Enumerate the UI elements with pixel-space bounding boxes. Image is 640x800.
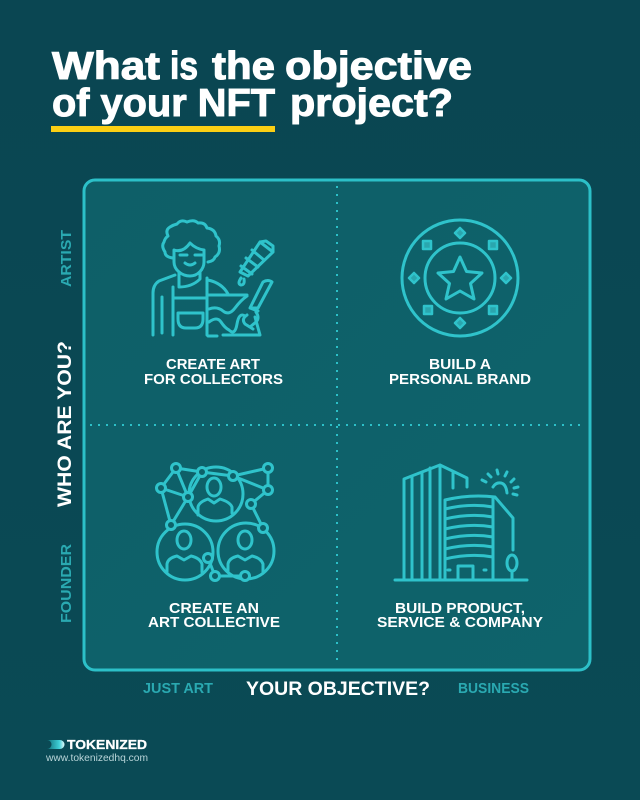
y axis label: artist: ARTIST	[58, 230, 75, 287]
label: build a personal brand	[389, 356, 531, 388]
y axis title: who are you?: WHO ARE YOU?	[55, 341, 76, 507]
icon: art collective network	[156, 464, 274, 580]
website url: www.tokenizedhq.com	[45, 753, 148, 764]
title	[52, 45, 472, 125]
title: of your NFT	[52, 82, 275, 125]
x axis label: just art: JUST ART	[143, 680, 213, 697]
label: create art for collectors: FOR COLLECTORS	[144, 371, 283, 388]
title: project?	[290, 82, 453, 125]
label: build product, service & company: SERVICE & COMPANY	[377, 614, 543, 631]
logo: tokenized: TOKENIZED	[67, 737, 147, 752]
y axis label: founder: FOUNDER	[58, 544, 75, 623]
label: create an art collective: CREATE AN	[169, 600, 259, 617]
panel: quadrant matrix	[84, 180, 590, 670]
x axis title: your objective?: YOUR OBJECTIVE?	[246, 679, 430, 700]
label: create art for collectors	[144, 356, 283, 388]
title: What	[52, 45, 160, 88]
label: create art for collectors: CREATE ART	[166, 356, 260, 373]
title: objective	[285, 45, 472, 88]
title: is	[170, 45, 198, 88]
label: build a personal brand: BUILD A	[429, 356, 491, 373]
icon: personal brand medal	[402, 220, 518, 336]
title: the	[212, 45, 275, 88]
label: build a personal brand: PERSONAL BRAND	[389, 371, 531, 388]
icon: building	[395, 465, 527, 580]
label: build product, service & company: BUILD PRODUCT,	[395, 600, 525, 617]
label: create an art collective	[148, 600, 280, 631]
icon: artist with brush	[153, 221, 273, 336]
x axis label: business: BUSINESS	[458, 680, 529, 697]
title underline	[51, 126, 275, 132]
label: create an art collective: ART COLLECTIVE	[148, 614, 280, 631]
label: build product, service & company	[377, 600, 543, 631]
